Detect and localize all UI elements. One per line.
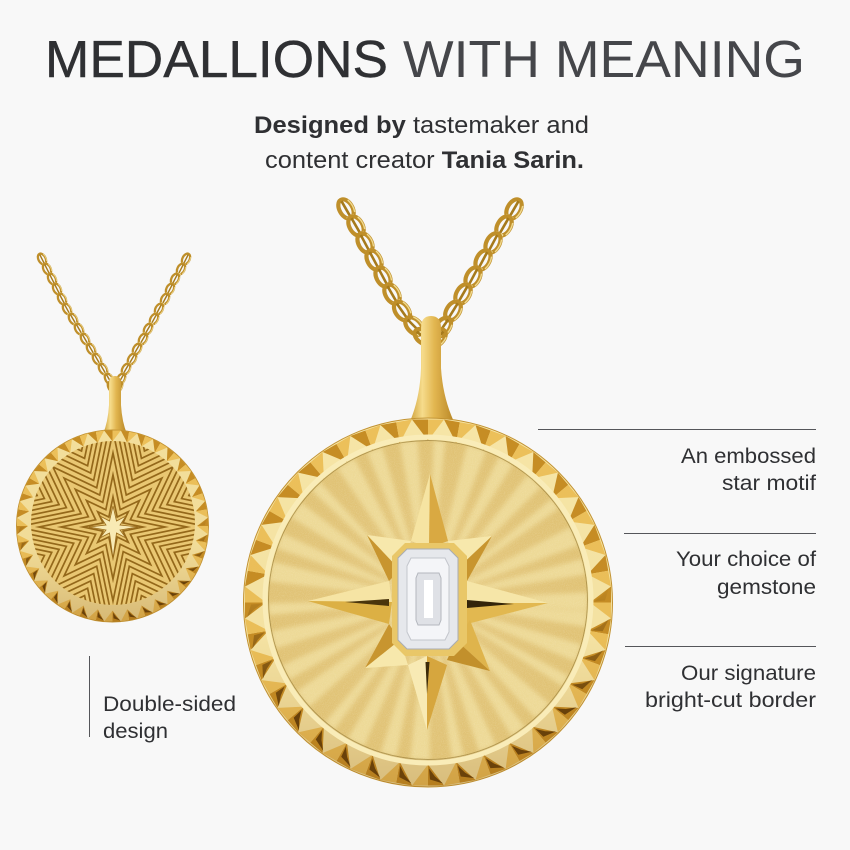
large medal ray-textured face [267,439,589,761]
title [45,31,805,89]
title: WITH MEANING [403,31,805,89]
small bale [103,376,127,434]
large chain [335,196,526,351]
small chain [36,252,192,394]
small pendant: back of medallion [16,252,209,622]
callout: bright-cut border: bright-cut border [645,689,816,712]
callout: embossed star motif: star motif [722,472,816,495]
callout: choice of gemstone: gemstone [717,576,816,599]
callout: choice of gemstone: Your choice of [676,548,816,571]
bezel-set emerald-cut gemstone [392,543,467,656]
callout: embossed star motif: An embossed [681,445,816,468]
large pendant: front of medallion [244,196,612,787]
callout: bright-cut border: Our signature [681,662,816,685]
subtitle: content creator Tania Sarin. [265,147,584,174]
subtitle: Designed by tastemaker and [254,112,589,139]
large medal border with bright-cut teeth [244,418,612,787]
callout: double-sided design: Double-sided [103,693,236,716]
small medal centre star [89,506,138,558]
eight-point star [308,474,548,730]
callout: embossed star motif [538,430,816,495]
large bale [408,316,456,426]
subtitle [254,112,589,174]
callout: choice of gemstone [624,534,816,599]
callout: bright-cut border [625,646,816,712]
small medal border [16,430,208,622]
small medal engraved star face [31,441,195,605]
callout: double-sided design [90,656,236,743]
callout: double-sided design: design [103,720,168,743]
title: MEDALLIONS [45,31,388,89]
